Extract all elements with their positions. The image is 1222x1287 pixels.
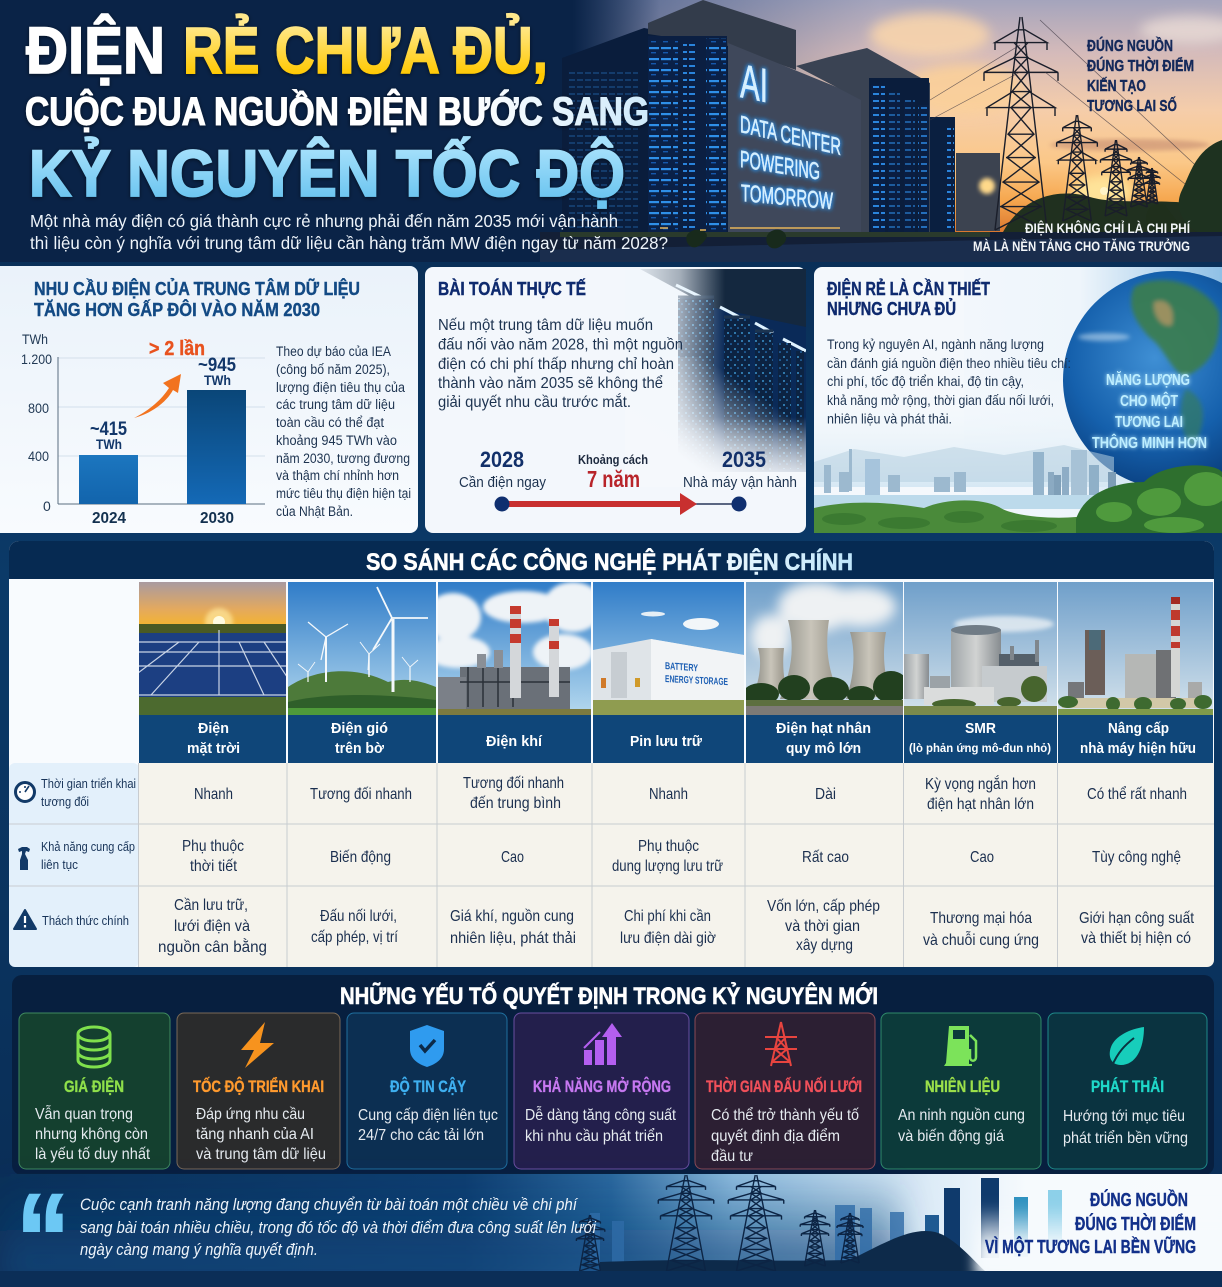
factor text: và trung tâm dữ liệu [196, 1146, 326, 1163]
factor title: GIÁ ĐIỆN [64, 1077, 124, 1096]
factor title: PHÁT THẢI [1091, 1077, 1164, 1096]
image: nuclear cooling towers [746, 582, 903, 715]
row values: main challenges: Đấu nối lưới, [320, 908, 397, 925]
timeline 2028 to 2035: 2035 [722, 447, 766, 472]
card heading: BÀI TOÁN THỰC TẾ [438, 278, 586, 299]
row label: deployment time: tương đối [41, 794, 89, 809]
card text: khả năng mở rộng, thời gian đấu nối lưới, [827, 392, 1054, 408]
row: continuous supply [18, 838, 1181, 875]
chart description: của Nhật Bản. [276, 504, 353, 519]
factor text: Cung cấp điện liên tục [358, 1107, 498, 1124]
row values: continuous supply: Rất cao [802, 849, 849, 866]
icon: shield [410, 1025, 444, 1067]
factor card: scalability [514, 1013, 689, 1169]
row values: main challenges: Giá khí, nguồn cung [450, 908, 574, 925]
factor card: grid connection time [695, 1013, 875, 1169]
card heading: NHU CẦU ĐIỆN CỦA TRUNG TÂM DỮ LIỆU [34, 278, 360, 299]
factor text: Đáp ứng nhu cầu [196, 1106, 305, 1123]
callout: more than double: > 2 lần [149, 338, 205, 360]
column headers: SMR [965, 720, 996, 737]
globe caption: CHO MỘT [1120, 391, 1178, 410]
icon: lightning bolt [241, 1022, 274, 1068]
row label: deployment time [41, 776, 136, 809]
row values: main challenges: nguồn cân bằng [158, 937, 267, 956]
row values: main challenges: cấp phép, vị trí [311, 929, 398, 946]
image: solar farm [139, 582, 286, 715]
globe caption: TƯƠNG LAI [1115, 414, 1183, 431]
row values: deployment time: Dài [815, 786, 836, 803]
factor card: deployment speed [177, 1013, 340, 1169]
row values: deployment time [194, 774, 1187, 813]
panel: real-world problem [425, 267, 806, 533]
factor text [898, 1107, 1025, 1145]
row values: deployment time: Nhanh [194, 786, 233, 803]
row values: main challenges [158, 897, 1194, 956]
factor text: Có thể trở thành yếu tố [711, 1106, 859, 1124]
factor title: TỐC ĐỘ TRIỂN KHAI [193, 1076, 324, 1096]
factor text: đầu tư [711, 1148, 753, 1165]
row values: continuous supply: Phụ thuộc [182, 838, 244, 855]
server room image [640, 269, 806, 472]
row values: main challenges: và chuỗi cung ứng [923, 930, 1039, 949]
globe caption [1092, 370, 1207, 452]
card text: đấu nối vào năm 2028, thì một nguồn [438, 336, 683, 354]
column headers: nhà máy hiện hữu [1080, 740, 1196, 757]
column headers: Pin lưu trữ [630, 733, 702, 750]
timeline 2028 to 2035: Nhà máy vận hành [683, 474, 797, 491]
bar chart: electricity demand in TWh: TWh [204, 372, 231, 388]
data center wall signage: DATA CENTER [740, 111, 841, 161]
quote text: ngày càng mang ý nghĩa quyết định. [80, 1241, 318, 1259]
factor title: THỜI GIAN ĐẤU NỐI LƯỚI [706, 1076, 862, 1096]
landscape image with globe and city [814, 267, 1222, 533]
table heading: SO SÁNH CÁC CÔNG NGHỆ PHÁT ĐIỆN CHÍNH [366, 548, 853, 576]
factor text: khi nhu cầu phát triển [525, 1127, 663, 1145]
row label column [9, 763, 139, 967]
row values: continuous supply: Tùy công nghệ [1092, 849, 1181, 866]
card text: Trong kỷ nguyên AI, ngành năng lượng [827, 336, 1044, 352]
closing slogan: ĐÚNG NGUỒN [1090, 1189, 1188, 1210]
data center wall signage [740, 54, 841, 215]
globe caption: NĂNG LƯỢNG [1106, 370, 1190, 389]
subtitle: thì liệu còn ý nghĩa với trung tâm dữ liệu cần hàng trăm MW điện ngay từ năm 2028? [30, 233, 668, 253]
data center wall signage: TOMORROW [741, 180, 833, 215]
hero tagline top right: TƯƠNG LAI SỐ [1087, 95, 1177, 115]
hero tagline bottom right: ĐIỆN KHÔNG CHỈ LÀ CHI PHÍ [1025, 219, 1191, 236]
row label: main challenges: Thách thức chính [42, 913, 129, 928]
bar chart: electricity demand in TWh: ~945 [198, 355, 236, 376]
factor text: Vẫn quan trọng [35, 1104, 133, 1123]
hero tagline top right: KIẾN TẠO [1087, 76, 1146, 95]
panel: technology comparison table [9, 541, 1214, 967]
card text: thành vào năm 2035 sẽ không thể [438, 374, 663, 392]
card text: cần đánh giá nguồn điện theo nhiều tiêu chí: [827, 355, 1071, 371]
factor text: và biến động giá [898, 1128, 1004, 1145]
hero tagline top right: ĐÚNG NGUỒN [1087, 36, 1173, 55]
icon: fuel pump [944, 1026, 976, 1066]
timeline 2028 to 2035: 7 năm [587, 466, 640, 492]
factor text [711, 1106, 859, 1165]
column headers [139, 715, 1213, 763]
closing slogan [985, 1189, 1196, 1257]
row values: main challenges: Thương mại hóa [930, 910, 1032, 927]
factor text: An ninh nguồn cung [898, 1107, 1025, 1124]
factor title: ĐỘ TIN CẬY [390, 1077, 467, 1096]
column headers: Điện gió [331, 720, 388, 737]
bar chart: electricity demand in TWh: 2024 [92, 510, 126, 527]
hero image: data center and power lines at sunset [0, 0, 1222, 262]
column headers: (lò phản ứng mô-đun nhỏ) [909, 741, 1051, 755]
section heading: NHỮNG YẾU TỐ QUYẾT ĐỊNH TRONG KỶ NGUYÊN MỚI [340, 981, 878, 1010]
icon: rising bars [584, 1023, 622, 1065]
panel: cheap power is necessary but not enough [814, 267, 1222, 533]
row values: main challenges: và thời gian [785, 918, 860, 935]
panel: closing banner [0, 1168, 1222, 1287]
row values: continuous supply: dung lượng lưu trữ [612, 858, 723, 875]
row values: continuous supply: thời tiết [190, 858, 237, 875]
panel: hero banner [0, 0, 1222, 262]
card text: giải quyết nhu cầu trước mắt. [438, 392, 631, 411]
column headers: Điện hạt nhân [776, 720, 871, 737]
factor text: 24/7 cho các tải lớn [358, 1127, 484, 1144]
table body cells [9, 763, 1214, 967]
factor text [1063, 1108, 1188, 1147]
row label: continuous supply: liên tục [41, 857, 78, 872]
timeline 2028 to 2035 [459, 447, 797, 515]
bar chart: electricity demand in TWh: 0 [43, 498, 51, 514]
card heading [827, 278, 990, 319]
factor text [525, 1105, 676, 1145]
card text: điện có chi phí thấp nhưng chỉ hoàn [438, 356, 674, 373]
timeline 2028 to 2035: 2028 [480, 447, 524, 472]
bar chart: electricity demand in TWh: ~415 [90, 419, 127, 440]
factor text: quyết định địa điểm [711, 1127, 840, 1145]
hero tagline bottom right [973, 219, 1191, 254]
row values: deployment time: Tương đối nhanh [463, 775, 564, 792]
icon: clock [16, 782, 34, 802]
column headers: Điện khí [486, 733, 543, 750]
row values: main challenges: lưu điện dài giờ [620, 930, 716, 947]
column headers: Điện [198, 720, 229, 737]
factor card: electricity price [19, 1013, 170, 1169]
factor text: Hướng tới mục tiêu [1063, 1108, 1185, 1125]
image: battery storage: BATTERY [665, 661, 698, 674]
factor title: KHẢ NĂNG MỞ RỘNG [533, 1077, 671, 1096]
row values: deployment time: đến trung bình [470, 795, 561, 812]
row values: deployment time: điện hạt nhân lớn [927, 796, 1034, 813]
main title: ĐIỆN [26, 13, 165, 87]
chart description: lượng điện tiêu thụ của [276, 380, 405, 395]
row label: continuous supply [41, 839, 135, 872]
factor text: nhưng không còn [35, 1126, 148, 1143]
row: main challenges [14, 897, 1194, 956]
row values: main challenges: Cần lưu trữ, [174, 897, 248, 914]
image: onshore wind [288, 582, 436, 715]
image: plant upgrade [1058, 582, 1213, 715]
skyline image [0, 1174, 1222, 1287]
image: gas plant [438, 582, 591, 715]
row values: main challenges: và thiết bị hiện có [1081, 930, 1191, 947]
row values: deployment time: Nhanh [649, 786, 688, 803]
row values: main challenges: Chi phí khi cần [624, 908, 711, 925]
main title: RẺ CHƯA ĐỦ, [183, 13, 548, 87]
quote text [80, 1196, 597, 1259]
row label: continuous supply: Khả năng cung cấp [41, 839, 135, 854]
timeline 2028 to 2035: Cần điện ngay [459, 474, 546, 491]
factor title: NHIÊN LIỆU [925, 1077, 1000, 1096]
bar chart: electricity demand in TWh: 2030 [200, 510, 234, 527]
card heading: NHƯNG CHƯA ĐỦ [827, 298, 956, 319]
row label: deployment time: Thời gian triển khai [41, 776, 136, 791]
bar chart: electricity demand in TWh: 800 [28, 400, 49, 416]
column headers: Nâng cấp [1108, 720, 1169, 737]
chart description: các trung tâm dữ liệu [276, 397, 395, 412]
factor card: emissions [1048, 1013, 1207, 1169]
card heading: ĐIỆN RẺ LÀ CẦN THIẾT [827, 278, 990, 299]
row: deployment time [16, 774, 1187, 813]
data center wall signage: POWERING [740, 146, 820, 186]
card heading [34, 278, 360, 320]
chart description: Theo dự báo của IEA [276, 344, 391, 359]
column headers: mặt trời [187, 740, 240, 757]
bar chart: electricity demand in TWh [21, 331, 265, 527]
subtitle: Một nhà máy điện có giá thành cực rẻ nhưng phải đến năm 2035 mới vận hành [30, 211, 618, 231]
icon: supply tower [18, 847, 30, 870]
arrow: growth [134, 374, 181, 418]
factor text: Dễ dàng tăng công suất [525, 1105, 676, 1124]
quote text: sang bài toán nhiều chiều, trong đó tốc độ và thời điểm đưa công suất lên lưới [80, 1219, 597, 1237]
factor text: là yếu tố duy nhất [35, 1146, 151, 1163]
card text: chi phí, tốc độ triển khai, độ tin cậy, [827, 373, 1024, 389]
row values: main challenges: Giới hạn công suất [1079, 910, 1194, 927]
chart description: (công bố năm 2025), [276, 362, 390, 377]
factor text: tăng nhanh của AI [196, 1126, 314, 1143]
row values: continuous supply [182, 838, 1181, 875]
icon: warning triangle [14, 910, 36, 929]
timeline 2028 to 2035: Khoảng cách [578, 452, 648, 467]
row values: continuous supply: Cao [501, 849, 524, 866]
bar chart: electricity demand in TWh: 1.200 [21, 351, 52, 367]
row values: main challenges: lưới điện và [174, 918, 250, 935]
quote text: Cuộc cạnh tranh năng lượng đang chuyển từ bài toán một chiều về chi phí [80, 1196, 578, 1214]
image: small modular reactor [904, 582, 1057, 715]
table header bar [9, 541, 1214, 579]
card text [827, 336, 1071, 426]
card heading: TĂNG HƠN GẤP ĐÔI VÀO NĂM 2030 [34, 299, 320, 320]
factor text: phát triển bền vững [1063, 1129, 1188, 1147]
column headers: quy mô lớn [786, 740, 861, 757]
icon: database [78, 1027, 110, 1067]
row values: deployment time: Có thể rất nhanh [1087, 785, 1187, 803]
card text: nhiên liệu và phát thải. [827, 410, 952, 426]
chart description: khoảng 945 TWh vào [276, 433, 397, 448]
factor text [196, 1106, 326, 1163]
row values: main challenges: Vốn lớn, cấp phép [767, 898, 880, 915]
main title: KỶ NGUYÊN TỐC ĐỘ [29, 136, 625, 210]
factor text [358, 1107, 498, 1144]
factor card: reliability [347, 1013, 507, 1169]
bar chart: electricity demand in TWh: 400 [28, 448, 49, 464]
row values: deployment time: Tương đối nhanh [310, 786, 412, 803]
chart description [276, 344, 411, 519]
chart description: mức tiêu thụ điện hiện tại [276, 486, 411, 501]
row values: main challenges: xây dựng [796, 937, 853, 954]
row values: continuous supply: Biến động [330, 849, 391, 866]
icon: leaf [1110, 1027, 1144, 1066]
panel: key decision factors [12, 975, 1214, 1175]
chart description: và thậm chí nhỉnh hơn [276, 468, 399, 483]
row values: continuous supply: Cao [970, 849, 994, 866]
subtitle [30, 211, 668, 253]
row values: continuous supply: Phụ thuộc [638, 838, 699, 855]
factor text [35, 1104, 151, 1163]
card text [438, 317, 683, 411]
row values: deployment time: Kỳ vọng ngắn hơn [925, 774, 1036, 793]
image: battery storage [593, 582, 744, 715]
factor card: fuel [881, 1013, 1041, 1169]
bar chart: electricity demand in TWh: TWh [22, 331, 48, 347]
bar chart: electricity demand in TWh: TWh [96, 436, 122, 452]
icon: transmission tower [765, 1022, 797, 1066]
hero tagline top right: ĐÚNG THỜI ĐIỂM [1087, 56, 1194, 75]
data center wall signage: AI [740, 54, 768, 113]
hero tagline top right [1087, 36, 1194, 115]
card text: Nếu một trung tâm dữ liệu muốn [438, 317, 653, 334]
chart description: toàn cầu có thể đạt [276, 415, 384, 430]
panel: data center demand [0, 266, 418, 533]
main title [25, 13, 649, 210]
column headers: trên bờ [335, 740, 384, 757]
row values: main challenges: nhiên liệu, phát thải [450, 930, 576, 947]
chart description: năm 2030, tương đương [276, 451, 410, 466]
main title: CUỘC ĐUA NGUỒN ĐIỆN BƯỚC SANG [25, 88, 649, 134]
